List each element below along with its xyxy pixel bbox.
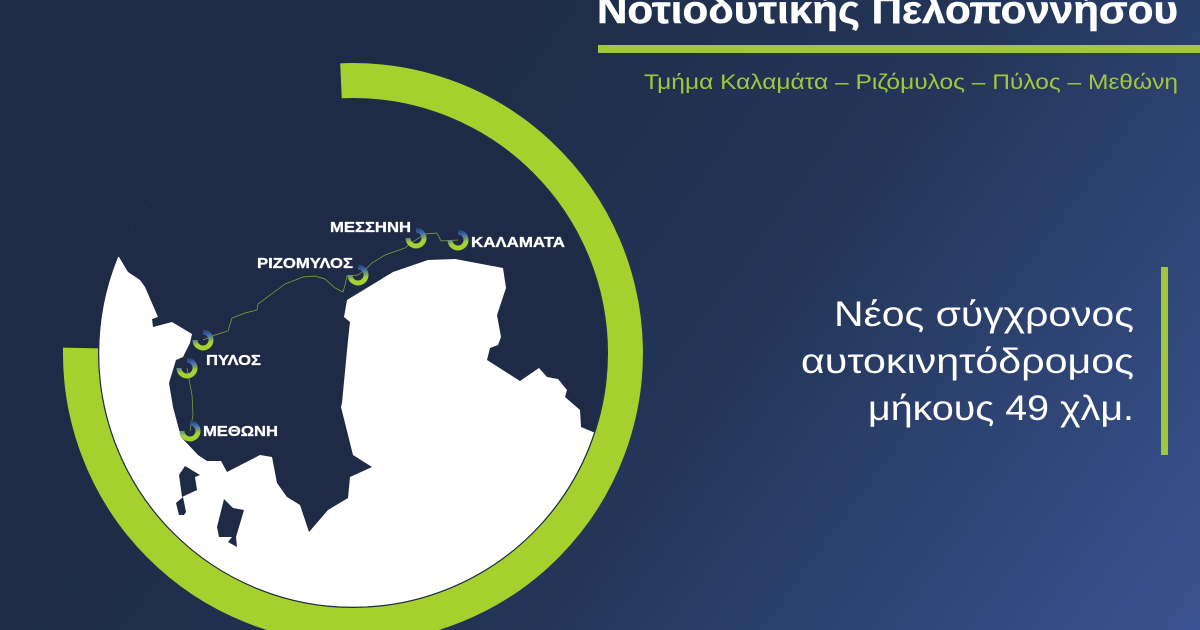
route line: [187, 233, 458, 431]
marker: Πύλος: [195, 332, 211, 348]
description text: αυτοκινητόδρομος: [801, 342, 1134, 381]
marker: Πύλος south: [179, 360, 195, 376]
label: Πύλος: ΠΥΛΟΣ: [206, 352, 261, 369]
subtitle: Τμήμα Καλαμάτα – Ριζόμυλος – Πύλος – Μεθώνη: [644, 71, 1178, 94]
map disc: [98, 98, 608, 608]
map: islands: [179, 466, 200, 497]
marker: Μεσσήνη: [408, 230, 424, 246]
label: Μεσσήνη: ΜΕΣΣΗΝΗ: [330, 219, 411, 236]
green ring: [81, 81, 625, 625]
title underline: [598, 45, 1200, 53]
map: dark land: [118, 99, 607, 547]
label: Καλαμάτα: ΚΑΛΑΜΑΤΑ: [471, 234, 565, 251]
label: Ριζόμυλος: ΡΙΖΟΜΥΛΟΣ: [257, 255, 353, 272]
marker: Καλαμάτα: [450, 232, 466, 248]
description text: μήκους 49 χλμ.: [868, 389, 1134, 428]
marker: Ριζόμυλος: [350, 267, 366, 283]
description text: [801, 295, 1134, 428]
marker: Μεθώνη: [182, 423, 198, 439]
description text: Νέος σύγχρονος: [834, 295, 1134, 334]
label: Μεθώνη: ΜΕΘΩΝΗ: [203, 423, 278, 440]
vertical accent bar: [1161, 267, 1168, 455]
